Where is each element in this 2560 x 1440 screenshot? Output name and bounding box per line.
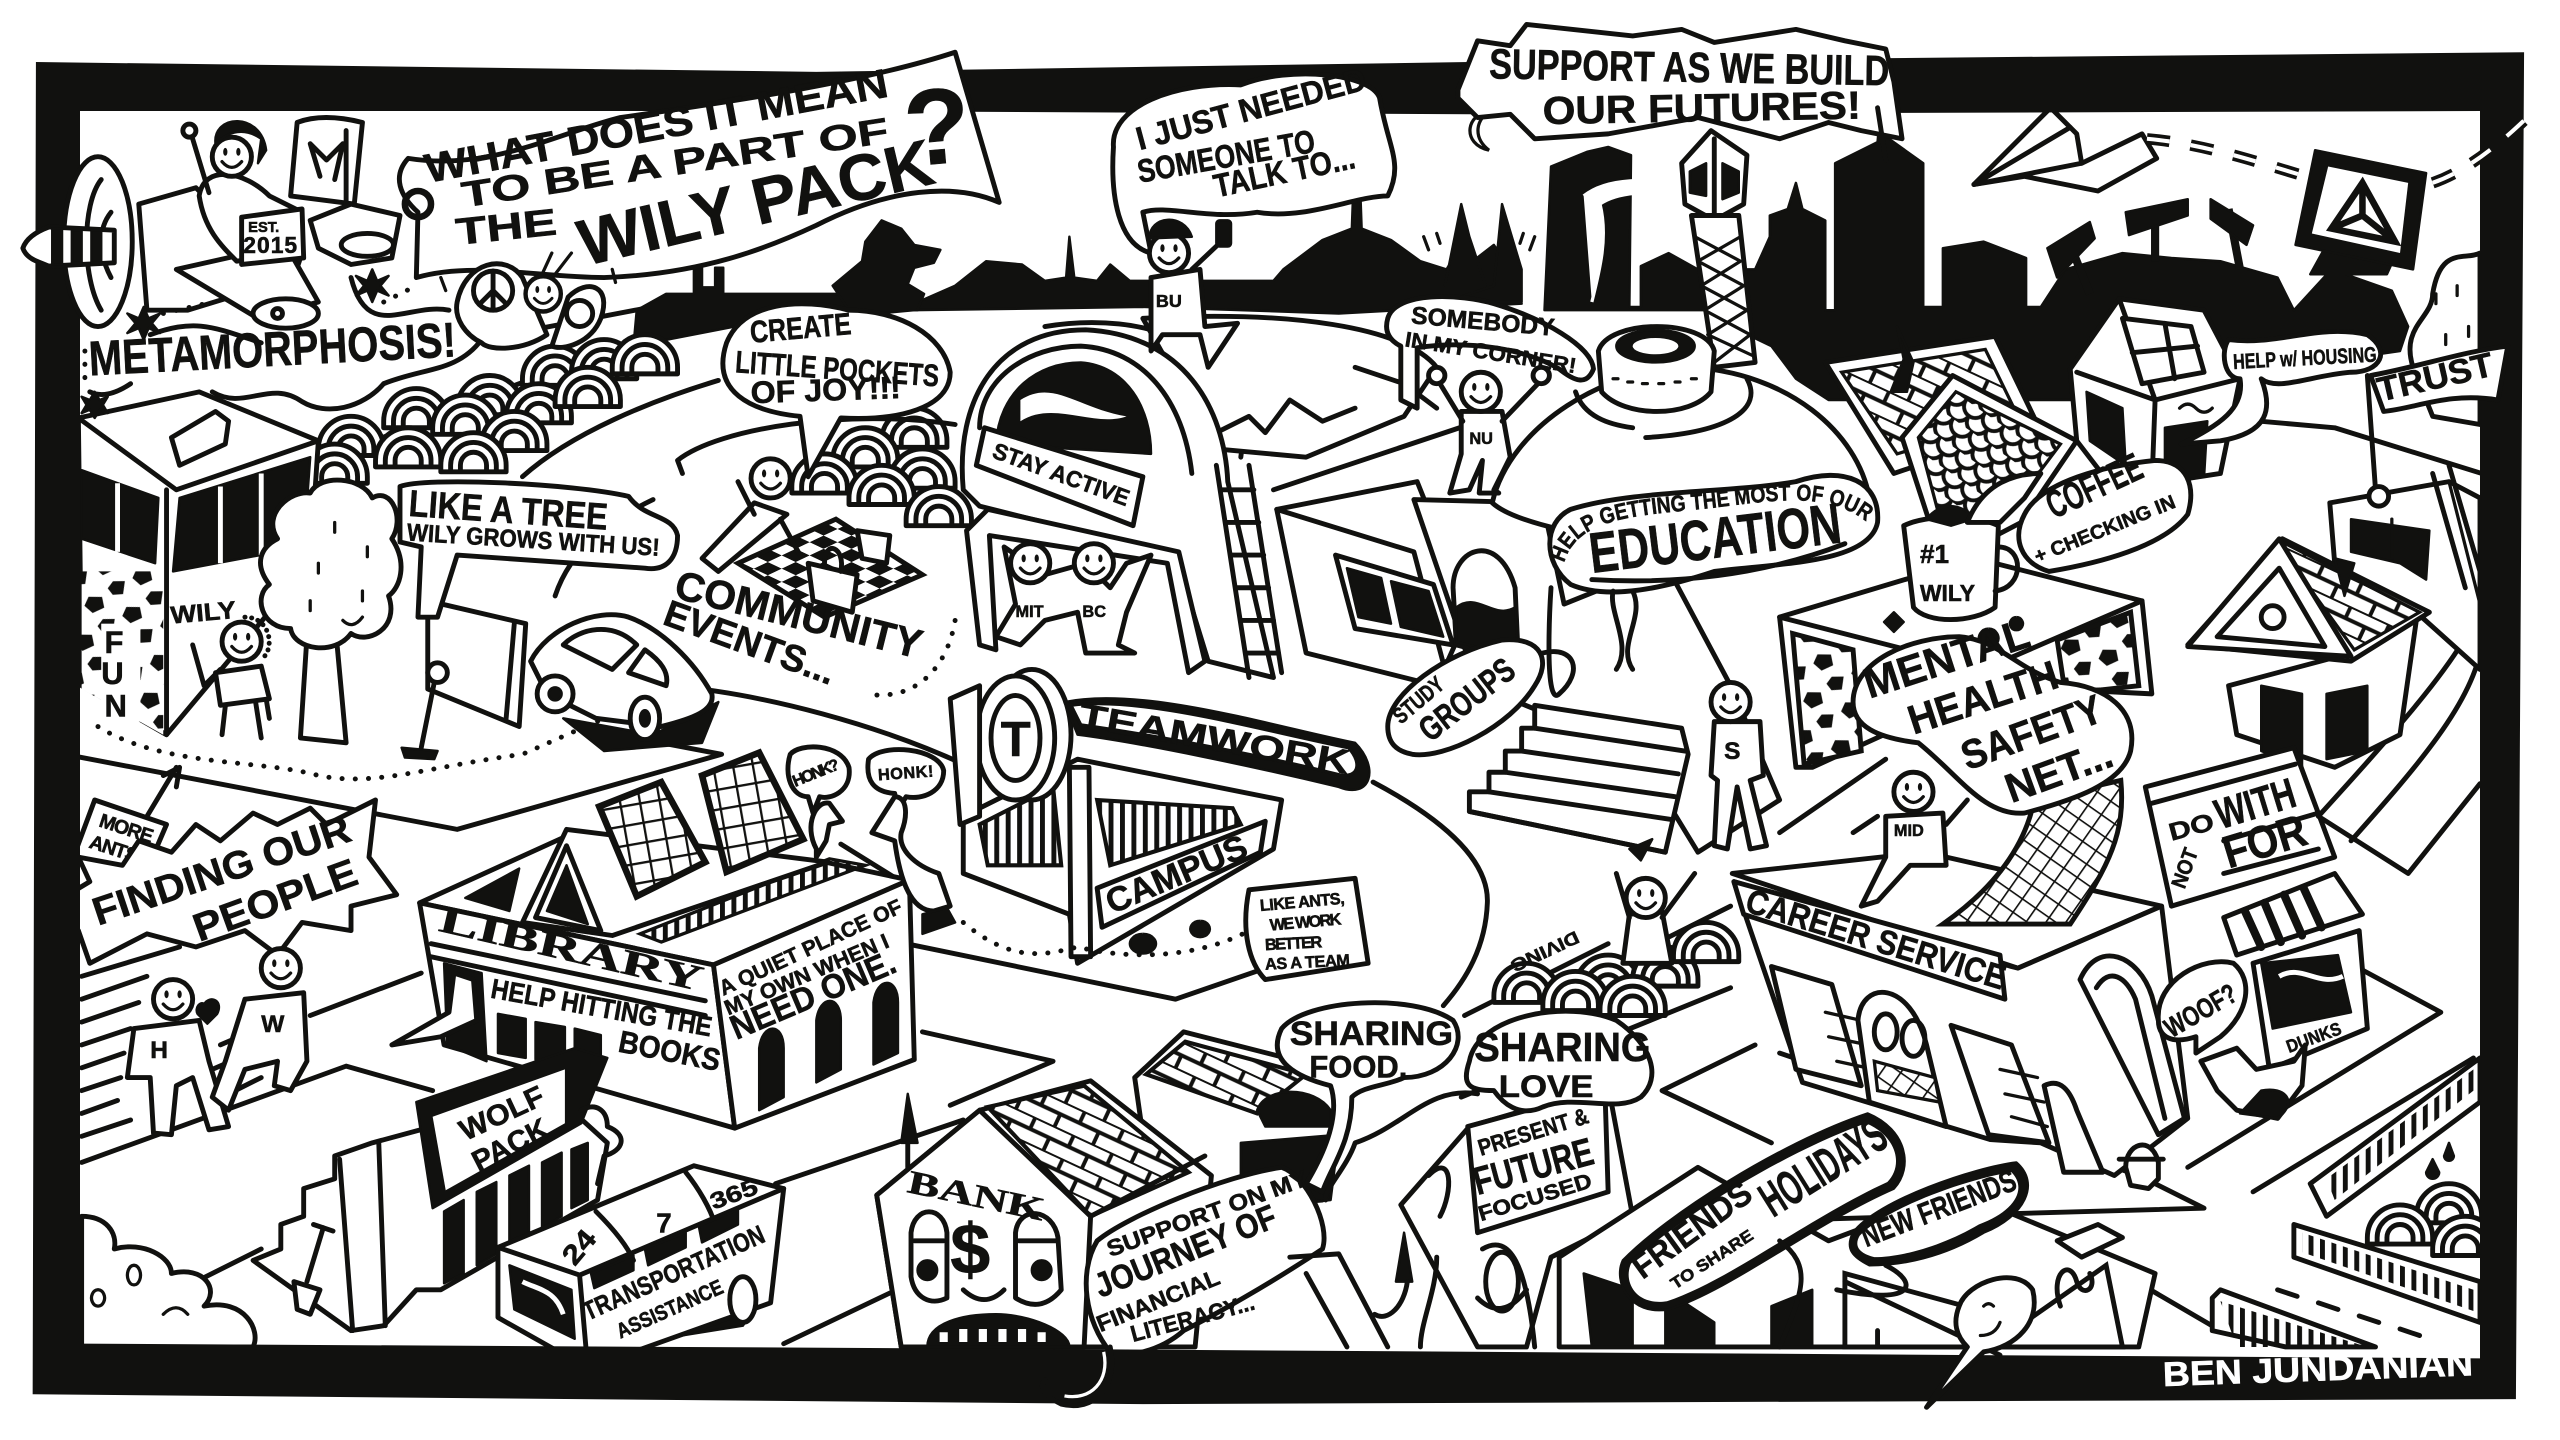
like a tree bubble <box>400 482 678 617</box>
sharing food bubble: FOOD. <box>1309 1050 1407 1085</box>
student S figure <box>1711 682 1767 849</box>
bus: TRANSPORTATION <box>578 1219 769 1326</box>
sharing food bubble <box>1277 1003 1458 1192</box>
somebody in my corner <box>1387 297 1593 493</box>
bank: $ <box>950 1209 990 1289</box>
housing building <box>2070 299 2240 490</box>
title banner: WILY PACK <box>571 125 940 280</box>
career service building <box>1732 852 2188 1176</box>
education bubble: HELP GETTING THE MOST OF OUR <box>1552 484 1873 562</box>
mental health cloud <box>1853 610 2132 813</box>
lattice tower <box>1682 131 1755 367</box>
title banner <box>399 52 999 280</box>
far right trees <box>2410 253 2480 424</box>
somebody in my corner: SOMEBODY <box>1410 302 1556 342</box>
somebody in my corner: NU <box>1469 430 1493 448</box>
scalloped hills upper left <box>302 335 678 483</box>
house behind bank <box>1135 1032 1347 1208</box>
library: MY OWN WHEN I <box>721 930 892 1020</box>
mid kid sitting: MID <box>1894 822 1924 840</box>
coffee bubble <box>2019 446 2191 571</box>
fenced park bottom right <box>2294 1058 2498 1322</box>
bu kid and bubble: TALK TO... <box>1210 138 1358 204</box>
teamwork sign <box>1064 697 1369 790</box>
friends building <box>1559 1167 2155 1355</box>
wily kid: WILY <box>170 597 237 630</box>
metamorphosis text: METAMORPHOSIS! <box>88 313 457 386</box>
coffee mug <box>1904 473 2041 620</box>
friends H and W on bench: W <box>261 1011 285 1038</box>
plane smoke trail <box>82 269 449 418</box>
teamwork sign: TEAMWORK <box>1076 697 1353 782</box>
lower right street fence <box>2212 784 2480 1347</box>
do with not for board: FOR <box>2217 805 2313 878</box>
financial literacy bubble: SUPPORT ON MY <box>1103 1165 1311 1262</box>
library: LIBRARY <box>436 899 707 999</box>
teamwork campus <box>963 759 1282 963</box>
career service building: CAREER SERVICE <box>1741 882 2010 997</box>
holidays banner: HOLIDAYS <box>1750 1108 1897 1227</box>
MIT and BC kids: BC <box>1082 603 1106 621</box>
present and future building <box>1401 1086 1633 1347</box>
do with not for board: DO <box>2166 809 2217 847</box>
friends H and W on bench: H <box>150 1037 168 1064</box>
sharing food bubble: SHARING <box>1290 1015 1453 1053</box>
bu kid and bubble: SOMEONE TO <box>1134 122 1318 190</box>
financial literacy bubble: FINANCIAL <box>1093 1264 1223 1337</box>
library: BOOKS <box>616 1024 723 1078</box>
honk geese: HONK! <box>877 763 934 784</box>
wolf pack building: PACK <box>467 1112 554 1178</box>
like ants bubble: BETTER <box>1265 933 1323 954</box>
bank: BANK <box>904 1164 1049 1229</box>
bus <box>498 1166 784 1368</box>
pedestrian crossing <box>2057 1224 2122 1257</box>
financial literacy bubble <box>1086 1165 1324 1354</box>
mental health cloud: NET... <box>1999 731 2119 812</box>
education building left wing <box>1277 482 1469 686</box>
bus: 24 <box>556 1223 603 1271</box>
title banner: WHAT DOES IT MEAN <box>421 60 892 192</box>
honk geese: HONK? <box>790 756 842 791</box>
education dome <box>1414 327 1869 852</box>
crescent moon <box>1470 111 1489 150</box>
bubble: create pockets of joy: LITTLE POCKETS <box>734 344 940 393</box>
library: A QUIET PLACE OF <box>716 895 906 1000</box>
do with not for board <box>2145 748 2335 906</box>
title banner: ? <box>899 63 975 189</box>
dashed flight path <box>2147 139 2305 176</box>
like ants bubble: AS A TEAM <box>1265 951 1350 974</box>
financial literacy bubble: JOURNEY OF <box>1089 1198 1282 1305</box>
wolf pack building: WOLF <box>454 1080 550 1148</box>
stay active building <box>962 330 1273 678</box>
mental health cloud: MENTAL <box>1858 610 2035 707</box>
t medallion: T <box>1001 713 1031 767</box>
like ants bubble <box>1246 878 1368 980</box>
bus: 7 <box>656 1208 672 1239</box>
coffee bubble: COFFEE <box>2040 446 2149 527</box>
picnic person <box>702 459 800 571</box>
diving into water <box>1464 873 1739 1016</box>
bu kid and bubble: I JUST NEEDED <box>1132 60 1370 157</box>
butterfly <box>441 253 616 348</box>
tree <box>260 480 401 743</box>
bush <box>82 1216 255 1347</box>
wily kid <box>170 597 269 738</box>
diving into water: DIVING <box>1507 927 1582 976</box>
mental health cloud: SAFETY <box>1955 686 2109 779</box>
education bubble <box>1547 472 1880 672</box>
kiwi bird <box>1927 1270 2092 1407</box>
bus: ASSISTANCE <box>613 1276 727 1343</box>
sharing love bubble <box>1325 1011 1652 1200</box>
wily building: F <box>104 625 123 660</box>
holidays banner <box>1620 1108 1905 1347</box>
bank <box>877 1081 1211 1347</box>
do with not for board: NOT <box>2168 845 2203 892</box>
community events text: EVENTS... <box>658 592 842 693</box>
MIT and BC kids: MIT <box>1016 603 1044 621</box>
bu kid and bubble <box>1113 60 1395 367</box>
plane: 2015 <box>243 232 297 258</box>
trust flag building <box>2330 376 2480 669</box>
shovel <box>294 1224 333 1314</box>
woof bubble and dog: WOOF? <box>2159 978 2242 1044</box>
study groups bubble <box>1387 588 1573 755</box>
awning shop <box>2224 873 2367 1069</box>
title banner: THE <box>454 201 559 253</box>
new friends bubble <box>1837 1162 2028 1295</box>
scalloped hills behind picnic <box>678 408 971 526</box>
stay active building: STAY ACTIVE <box>989 437 1133 511</box>
title banner: TO BE A PART OF <box>459 110 891 215</box>
present and future building: FUTURE <box>1469 1131 1598 1204</box>
new friends bubble: NEW FRIENDS <box>1856 1163 2021 1254</box>
fire hydrant <box>2119 1145 2163 1189</box>
bubble: create pockets of joy: OF JOY!!! <box>750 370 901 410</box>
library: NEED ONE. <box>725 943 902 1047</box>
wolf pack building <box>253 1048 621 1331</box>
mid kid sitting <box>1853 772 1967 906</box>
bu kid and bubble: BU <box>1156 291 1182 311</box>
wily building: N <box>104 689 127 724</box>
coffee bubble: + CHECKING IN <box>2031 491 2179 568</box>
MIT and BC kids <box>996 544 1151 653</box>
honk geese <box>788 747 955 934</box>
mental health building <box>1780 558 2152 767</box>
small house on right <box>2188 539 2429 767</box>
education stairs <box>1469 705 1688 860</box>
library <box>392 753 914 1128</box>
library: HELP HITTING THE <box>489 973 714 1042</box>
trust banner: TRUST <box>2374 346 2497 409</box>
paper plane <box>1974 108 2157 191</box>
holidays banner: FRIENDS <box>1625 1174 1759 1286</box>
community events text: COMMUNITY <box>670 562 927 668</box>
more ants sign: ANTS! <box>87 831 146 869</box>
finding our people burst: PEOPLE <box>188 851 363 950</box>
support bubble: SUPPORT AS WE BUILD <box>1489 40 1890 94</box>
help with housing bubble: HELP w/ HOUSING <box>2233 343 2377 374</box>
study groups bubble: STUDY <box>1387 671 1449 729</box>
financial literacy bubble: LITERACY... <box>1128 1289 1257 1347</box>
lawn wall sign post and dots <box>98 601 955 779</box>
flight path over frame <box>2433 106 2539 183</box>
awning shop: DUNKS <box>2284 1018 2344 1057</box>
more ants sign <box>73 767 180 882</box>
propeller <box>23 157 132 327</box>
bubble: create pockets of joy <box>723 304 950 477</box>
wolves skyline <box>1424 204 1535 302</box>
t medallion <box>950 669 1071 824</box>
coffee mug: WILY <box>1920 580 1975 606</box>
like a tree bubble: WILY GROWS WITH US! <box>406 519 660 562</box>
coffee mug: #1 <box>1920 539 1949 569</box>
hill signs <box>2047 199 2253 294</box>
unicorn lamp <box>1290 1233 1437 1347</box>
support bubble: OUR FUTURES! <box>1542 85 1861 133</box>
present and future building: FOCUSED <box>1476 1170 1595 1226</box>
ladder <box>1216 465 1282 678</box>
holidays banner: TO SHARE <box>1667 1226 1757 1293</box>
logo billboard <box>2296 150 2426 274</box>
like ants bubble: WE WORK <box>1269 910 1342 935</box>
safety net <box>1943 780 2122 924</box>
friends H and W on bench <box>127 949 307 1135</box>
teamwork campus: CAMPUS <box>1100 828 1253 922</box>
education bubble: EDUCATION <box>1586 492 1845 586</box>
wily building: U <box>101 656 124 691</box>
finding our people burst: FINDING OUR <box>87 808 356 934</box>
picnic blanket <box>738 519 922 617</box>
help with housing bubble <box>2181 331 2381 444</box>
support bubble <box>1458 24 1902 160</box>
more ants sign: MORE <box>96 810 156 848</box>
like ants bubble: LIKE ANTS, <box>1259 890 1345 915</box>
student S figure: S <box>1724 738 1740 765</box>
ground roads and lots <box>73 302 2482 1344</box>
solar panel roofs behind dome <box>1825 327 2077 563</box>
bench stripes <box>82 947 278 1136</box>
sharing love bubble: SHARING <box>1474 1024 1651 1070</box>
present and future building: PRESENT & <box>1475 1102 1592 1161</box>
woof bubble and dog <box>2158 962 2305 1118</box>
plane: EST. <box>248 220 279 236</box>
somebody in my corner: IN MY CORNER! <box>1403 328 1578 378</box>
sharing love bubble: LOVE <box>1499 1069 1593 1104</box>
hill map behind stay active <box>1143 316 1437 457</box>
plane <box>139 117 400 328</box>
do with not for board: WITH <box>2209 769 2301 838</box>
bubble: create pockets of joy: CREATE <box>749 306 852 350</box>
study groups bubble: GROUPS <box>1412 651 1523 749</box>
bus: 365 <box>706 1173 762 1214</box>
wily building <box>78 392 318 735</box>
car <box>531 615 718 751</box>
finding our people burst <box>57 800 397 963</box>
artist signature: BEN JUNDANIAN <box>2162 1345 2474 1394</box>
bubble tail over frame <box>1042 1347 1112 1406</box>
mental health cloud: HEALTH <box>1902 652 2064 743</box>
like a tree bubble: LIKE A TREE <box>408 482 609 538</box>
skyline silhouette <box>633 106 2408 400</box>
